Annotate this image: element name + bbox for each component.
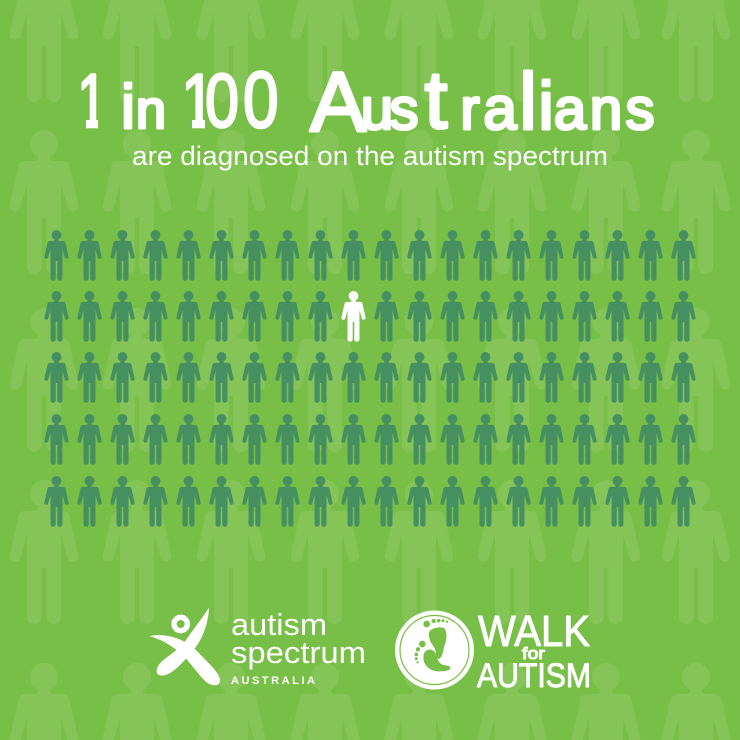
title: a — [483, 75, 517, 142]
Walk for Autism wordmark: WALK — [478, 607, 590, 656]
title — [82, 70, 654, 132]
title: u — [361, 77, 393, 142]
title: i — [538, 68, 554, 144]
title: 1 — [181, 59, 215, 144]
logo wordmark: AUSTRALIA — [231, 675, 315, 687]
row 5 of people — [44, 476, 696, 527]
row 2 of people — [44, 291, 696, 342]
row 3 of people — [44, 352, 696, 403]
subtitle: are diagnosed on the autism spectrum — [132, 141, 608, 171]
title: 1 — [77, 59, 107, 143]
title: n — [590, 77, 622, 142]
Walk for Autism wordmark: AUTISM — [477, 657, 591, 695]
footprint badge — [395, 610, 474, 690]
title: A — [310, 55, 366, 149]
title: n — [136, 80, 166, 140]
title: a — [554, 77, 587, 142]
logo wordmark: spectrum — [231, 635, 366, 670]
title: t — [425, 55, 448, 146]
highlighted white person — [341, 291, 366, 342]
title: 0 — [243, 55, 279, 145]
row 4 of people — [44, 414, 696, 465]
logo: Autism Spectrum Australia — [149, 607, 366, 687]
title: 0 — [205, 59, 239, 144]
logo mark — [149, 608, 220, 685]
title: r — [460, 77, 480, 142]
logo: Walk for Autism — [395, 607, 591, 695]
pictogram: 100 people, one highlighted — [44, 230, 696, 527]
logo wordmark: autism — [231, 607, 327, 642]
Walk for Autism wordmark: for — [522, 644, 545, 663]
row 1 of people — [44, 230, 696, 281]
title: i — [121, 73, 135, 142]
title: s — [626, 77, 654, 142]
title: s — [390, 77, 418, 142]
title: l — [519, 57, 537, 146]
